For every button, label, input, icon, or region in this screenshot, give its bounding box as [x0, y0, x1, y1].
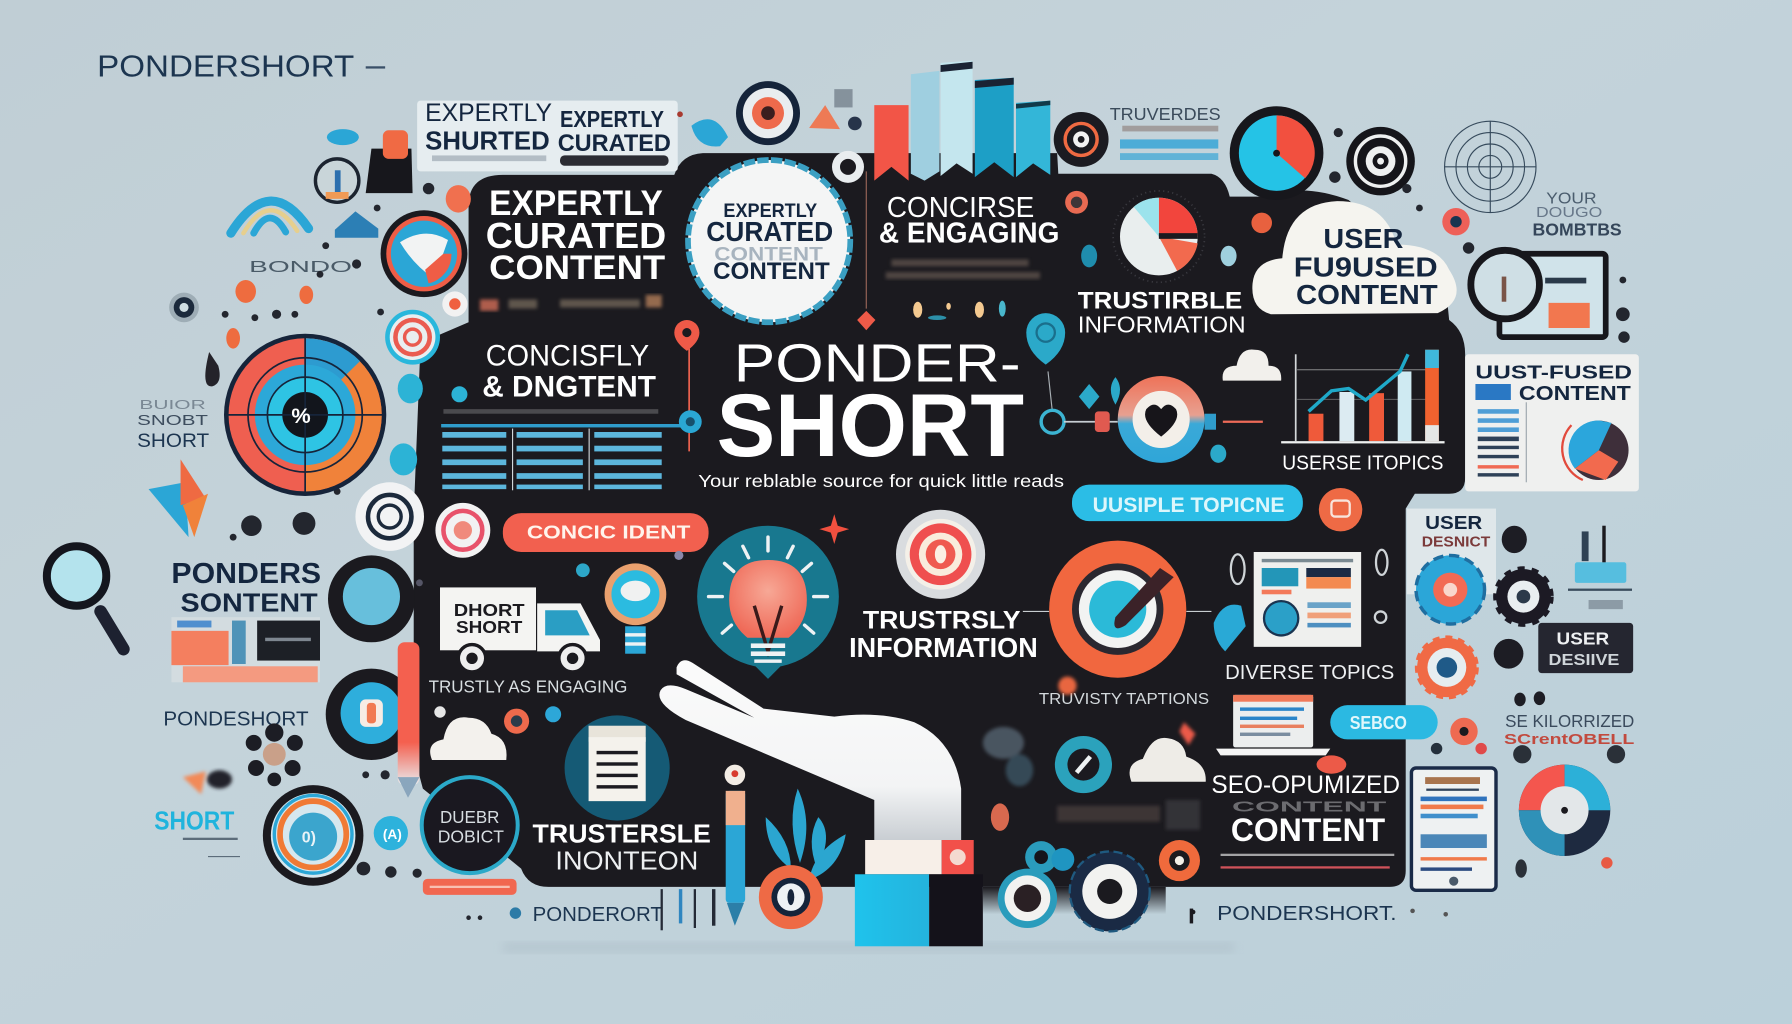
kite star icon	[149, 459, 208, 537]
top label box: SHURTED	[425, 126, 550, 156]
pie chart top	[1113, 191, 1205, 282]
heading: concise and engaging: & ENGAGING	[879, 217, 1059, 249]
red circle	[1442, 208, 1470, 235]
cyan tools	[1568, 526, 1632, 609]
pencil	[398, 642, 419, 798]
centre title: SHORT	[717, 375, 1024, 475]
heading: expertly curated content	[486, 183, 666, 287]
orange donut target	[1023, 541, 1211, 678]
dark panel misc dots	[416, 551, 683, 734]
dark central panel	[414, 153, 1465, 887]
label underlines	[183, 838, 240, 857]
heading: concisely and dngtent: & DNGTENT	[482, 371, 656, 404]
ring target small	[169, 293, 199, 322]
small content panel	[171, 617, 320, 682]
user design tag: DESIIVE	[1549, 652, 1620, 669]
ring circle	[998, 869, 1057, 928]
cyan pill: sebco: SEBCO	[1350, 712, 1407, 733]
circle: duebr dobict: DUEBR	[440, 807, 499, 827]
truck: SHORT	[456, 617, 523, 637]
target white red	[896, 510, 985, 599]
line bar chart	[1281, 350, 1445, 443]
eye circle bottom	[759, 865, 823, 929]
small cyan	[1025, 841, 1074, 873]
heading: trustirble information: INFORMATION	[1078, 312, 1246, 338]
big cloud: user focused content: FU9USED	[1294, 252, 1438, 283]
user card	[1407, 509, 1496, 594]
top right icons	[1054, 104, 1630, 343]
cyan circle mid	[1055, 736, 1112, 793]
orange eye	[1159, 840, 1200, 881]
label: trustly and engaging: TRUSTLY AS ENGAGING	[429, 677, 627, 697]
orange camera circle	[1319, 488, 1362, 531]
blue gear	[1416, 555, 1485, 624]
misc dots bottom-left	[357, 770, 482, 920]
heading: seo optimized content: CONTENT	[1231, 812, 1386, 848]
circle: duebr dobict	[422, 777, 518, 873]
short cyan label: SHORT	[154, 806, 234, 836]
left label stack: BUIOR	[139, 398, 206, 412]
dark side bump lower	[326, 669, 417, 760]
heart circle	[1118, 376, 1205, 463]
heading: trustersle inonteon	[533, 818, 711, 876]
badge: expertly curated content: EXPERTLY	[723, 200, 817, 222]
heading: concise and engaging: CONCIRSE	[887, 192, 1034, 224]
big cloud: user focused content: USER	[1323, 223, 1404, 254]
small side icons	[1065, 191, 1272, 267]
cyan app circle	[341, 682, 402, 744]
orange leaf cluster	[226, 280, 313, 349]
cyan pin top right	[1026, 313, 1065, 414]
plant leaves	[766, 789, 846, 880]
left scattered icons	[47, 129, 715, 930]
clock pie dial	[1230, 106, 1323, 200]
bulb circle	[697, 526, 839, 679]
bottom circles	[998, 840, 1200, 931]
bottom ponder short label: PONDERSHORT.	[1217, 902, 1397, 925]
badge: expertly curated content: CONTENT	[714, 244, 823, 266]
card: user focused content: UUST-FUSED	[1475, 361, 1632, 382]
red small blobs	[991, 755, 1346, 831]
pill with concentric circle	[435, 503, 709, 558]
seo optimized label: SCrentOBELL	[1504, 732, 1634, 748]
striped table	[441, 424, 686, 490]
magnifying glass	[47, 546, 123, 649]
your bombtbs label: BOMBTBS	[1533, 219, 1622, 239]
heading: concise and engaging	[879, 192, 1059, 249]
connector to heart	[1041, 410, 1263, 433]
left label stack	[137, 398, 209, 452]
dark blobs	[1494, 526, 1545, 706]
cyan bowl icon	[327, 129, 359, 145]
dashboard card	[1254, 552, 1361, 647]
badge: expertly curated content: CURATED	[706, 216, 833, 247]
dark gear	[1496, 569, 1551, 624]
small glyphs near top eye	[677, 89, 862, 130]
user design tag: USER	[1557, 629, 1610, 649]
blue leaves icon	[691, 119, 728, 146]
orange and dark blobs	[183, 770, 232, 794]
small cyan circle	[374, 816, 408, 850]
big cloud: user focused content: CONTENT	[1296, 279, 1438, 310]
heading: seo optimized content	[1211, 771, 1400, 869]
big concentric target: %	[291, 403, 311, 428]
rainbow target	[263, 785, 363, 886]
thin radar	[1445, 121, 1536, 213]
small cloud	[1223, 349, 1281, 381]
your bombtbs label: DOUGO	[1536, 205, 1602, 221]
small cyan circle: (A)	[383, 827, 402, 842]
hand	[659, 660, 961, 840]
cyan pill: usiple topics	[1072, 485, 1303, 521]
small white ring circle	[442, 291, 467, 317]
seo optimized label	[1504, 711, 1634, 748]
heading: concisely and dngtent: CONCISFLY	[486, 340, 649, 373]
circle badge with wedge	[381, 210, 467, 297]
big cloud: user focused content	[1252, 201, 1457, 314]
tablet document	[1411, 768, 1496, 890]
ponders content label	[171, 558, 321, 617]
seo optimized label: SE KILORRIZED	[1505, 711, 1634, 731]
dots	[1329, 128, 1630, 343]
cuff	[855, 840, 983, 946]
dark side bump top	[328, 555, 415, 642]
cyan drops	[390, 374, 467, 475]
floor shadow band	[503, 942, 1234, 953]
row of small glows	[913, 301, 1006, 320]
diamonds above heart	[1079, 377, 1226, 463]
smudge text rows	[886, 259, 1040, 279]
top label box: EXPERTLY	[560, 106, 664, 132]
eye icon on panel top	[832, 151, 864, 183]
ponders content label: PONDERS	[171, 558, 321, 590]
red plus	[819, 514, 849, 544]
scattered dots	[222, 183, 434, 541]
spiral ring circle	[385, 310, 440, 365]
big concentric target	[224, 334, 386, 496]
heading: trustrsly information	[849, 607, 1038, 663]
heading: expertly curated content: EXPERTLY	[489, 183, 663, 223]
white ring circle	[355, 482, 424, 551]
truverdes label	[1110, 104, 1221, 160]
scattered glyphs	[1513, 745, 1625, 878]
donut chart	[1519, 765, 1610, 856]
blob icon	[205, 352, 220, 386]
heading: trustersle inonteon: INONTEON	[555, 846, 698, 876]
heading: trustrsly information: INFORMATION	[849, 632, 1038, 663]
clock icon	[315, 159, 359, 202]
smudge row under heading	[480, 295, 662, 311]
laptop	[1216, 695, 1330, 755]
red pin	[1431, 718, 1487, 754]
orange cone icon	[809, 105, 840, 129]
top label box: CURATED	[558, 130, 671, 157]
document circle	[565, 715, 670, 821]
house icon	[335, 211, 378, 238]
eye circle top	[736, 81, 800, 145]
heading: concisely and dngtent	[482, 340, 656, 404]
left label stack: SNOBT	[137, 413, 208, 429]
centre title	[698, 334, 1064, 491]
heading: trustirble information	[1078, 288, 1246, 338]
heading: trustrsly information: TRUSTRSLY	[863, 607, 1021, 635]
pill with concentric circle: CONCIC IDENT	[527, 521, 690, 542]
panel shadow fade under centre	[983, 887, 1166, 914]
heading: seo optimized content: CONTENT	[1232, 799, 1386, 815]
ponder short label: PONDESHORT	[163, 708, 309, 731]
dark hat icon	[366, 130, 413, 193]
badge: expertly curated content: CONTENT	[713, 258, 830, 285]
cyan pill: sebco	[1330, 705, 1438, 739]
truck	[440, 587, 600, 672]
card side glyphs	[1231, 550, 1387, 623]
cyan pill: usiple topics: UUSIPLE TOPICNE	[1093, 492, 1285, 517]
centre title: PONDER-	[734, 334, 1021, 394]
heading: expertly curated content: CURATED	[486, 215, 666, 256]
dark gear blob	[246, 723, 303, 786]
cloud lower	[1130, 738, 1206, 782]
your bombtbs label	[1533, 190, 1622, 239]
truck: DHORT	[454, 600, 525, 620]
smudge line	[443, 409, 658, 414]
spiral icon	[1346, 127, 1415, 195]
heading: seo optimized content: SEO-OPUMIZED	[1211, 771, 1400, 799]
card: user focused content	[1465, 354, 1639, 491]
rainbow target: 0)	[302, 829, 316, 846]
left label stack: SHORT	[137, 430, 209, 452]
blue blob icon	[1214, 605, 1246, 651]
heading: expertly curated content: CONTENT	[489, 249, 665, 287]
page title: PONDERSHORT	[97, 49, 354, 84]
red leaf small	[446, 185, 471, 213]
lens icon	[605, 563, 666, 654]
circle: duebr dobict: DOBICT	[438, 826, 505, 846]
faint label: BONDO	[249, 259, 352, 276]
heading: trustirble information: TRUSTIRBLE	[1078, 288, 1242, 315]
centre title: Your reblable source for quick little reads	[698, 471, 1064, 491]
label: diverse topics: DIVERSE TOPICS	[1225, 661, 1394, 684]
dark panel mid decorations	[983, 677, 1200, 830]
truverdes label: TRUVERDES	[1110, 104, 1221, 124]
top label box	[417, 99, 678, 171]
small red tag	[423, 879, 517, 895]
orange gear	[1417, 638, 1477, 697]
bottom ponderort label: PONDERORT	[533, 903, 663, 926]
label: userse topics: USERSE ITOPICS	[1282, 452, 1443, 475]
cloud left	[430, 717, 507, 760]
thin bars	[661, 889, 715, 930]
pencil upright	[725, 765, 745, 926]
wifi arcs icon	[231, 201, 309, 233]
badge: expertly curated content	[688, 160, 850, 322]
screen with magnifier	[1471, 250, 1606, 337]
top label box: EXPERTLY	[425, 99, 552, 127]
connector with pins left	[674, 171, 875, 451]
bottom ponder short label	[1190, 902, 1448, 925]
user card: DESNICT	[1422, 534, 1490, 550]
user design tag	[1538, 623, 1633, 673]
ponders content label: SONTENT	[181, 587, 318, 617]
target dark circle	[1054, 112, 1109, 167]
user card: USER	[1425, 512, 1482, 533]
right column	[1407, 509, 1634, 890]
light blue icon circle	[343, 568, 400, 625]
side icons panel left	[341, 568, 419, 798]
gear ring	[1070, 851, 1150, 931]
card: user focused content: CONTENT	[1519, 382, 1631, 405]
bookmark banners	[874, 61, 1050, 181]
your bombtbs label: YOUR	[1546, 190, 1597, 207]
label: trusty captions: TRUVISTY TAPTIONS	[1039, 691, 1209, 708]
heading: trustersle inonteon: TRUSTERSLE	[533, 818, 711, 848]
